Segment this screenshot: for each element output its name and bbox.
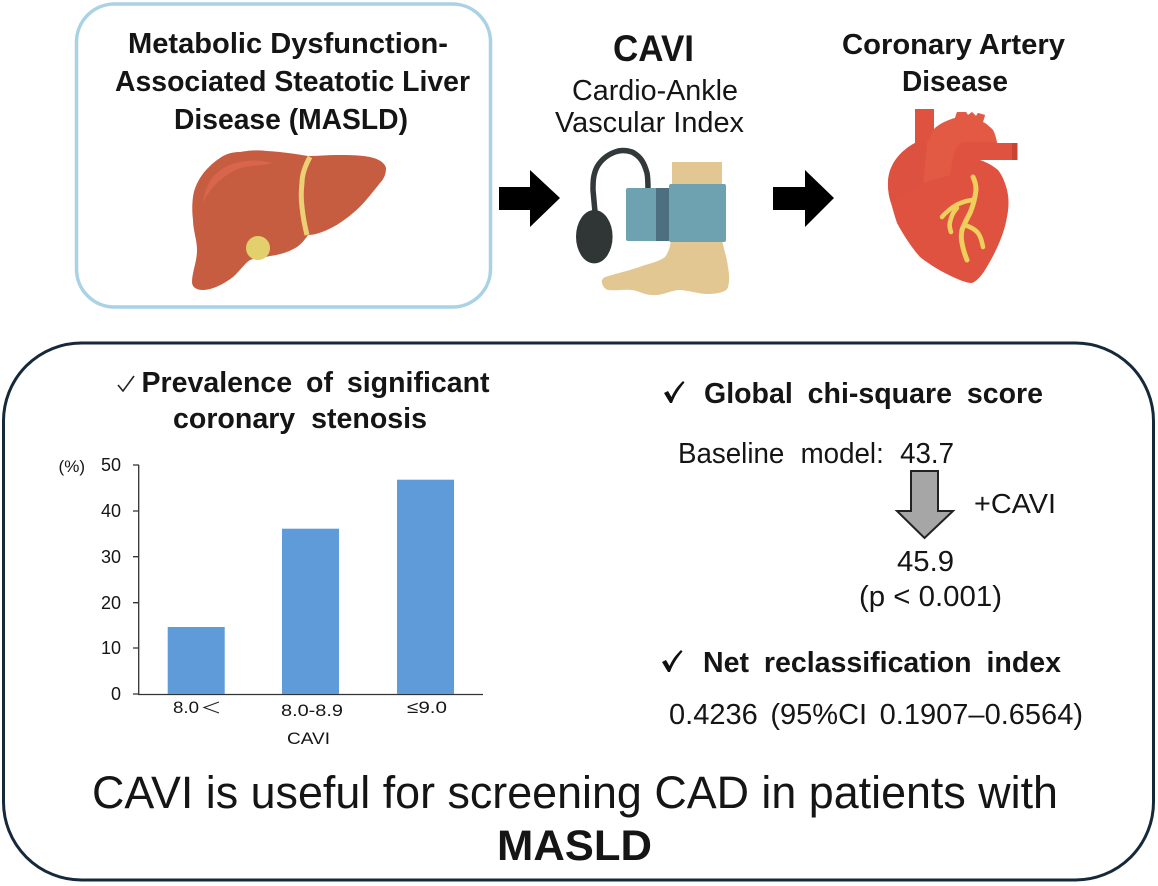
heading: CAVI (555, 28, 744, 139)
section: global chi-square score: (p < 0.001) (859, 581, 1002, 613)
x axis labels: 8.0-8.9 (281, 701, 343, 720)
arrow: MASLD to CAVI (499, 170, 560, 227)
section: net reclassification index: 0.4236 (95%CI 0.1907–0.6564) (669, 699, 1083, 731)
arrow: baseline to CAVI model (897, 471, 953, 538)
section: net reclassification index (662, 647, 1083, 731)
conclusion (92, 767, 1058, 870)
x axis labels: CAVI (287, 729, 330, 748)
heading: prevalence of significant coronary stenosis: coronary stenosis (173, 403, 427, 435)
icon: liver (192, 150, 386, 290)
icon: blood pressure cuff on ankle (576, 150, 729, 295)
y axis labels: 10 (101, 638, 121, 658)
x axis labels (173, 698, 447, 748)
section: global chi-square score: +CAVI (974, 488, 1056, 519)
conclusion: MASLD (497, 822, 652, 870)
heading: MASLD: Metabolic Dysfunction- (128, 28, 448, 60)
y axis labels (59, 455, 121, 704)
heading: MASLD (115, 28, 470, 136)
panel: results (4, 343, 1154, 880)
x axis labels: 8.0 (173, 698, 199, 717)
bar: CAVI 8.0-8.9 (282, 529, 339, 694)
bar: CAVI below 8.0 (168, 627, 225, 694)
y axis labels: 40 (101, 501, 121, 521)
heading: MASLD: Associated Steatotic Liver (115, 66, 470, 98)
section: global chi-square score (664, 378, 1056, 613)
y axis labels: (%) (59, 457, 85, 476)
heading: CAVI: Cardio-Ankle (572, 75, 738, 107)
section: global chi-square score: Global chi-square score (704, 378, 1043, 410)
y axis labels: 20 (101, 593, 121, 613)
heading: CAVI: CAVI (613, 28, 694, 69)
heading: CAVI: Vascular Index (555, 107, 744, 139)
conclusion: CAVI is useful for screening CAD in patients with (92, 767, 1058, 818)
icon: heart (888, 109, 1018, 283)
section: global chi-square score: 45.9 (897, 546, 954, 578)
heading: prevalence of significant coronary stenosis: Prevalence of significant (142, 367, 490, 399)
y axis labels: 30 (101, 547, 121, 567)
y axis labels: 0 (111, 684, 121, 704)
heading: prevalence of significant coronary stenosis (118, 367, 490, 435)
heading: MASLD: Disease (MASLD) (174, 104, 408, 136)
heading: coronary artery disease: Disease (902, 66, 1008, 98)
bar: CAVI 9.0 and above (397, 480, 454, 694)
section: global chi-square score: Baseline model: 43.7 (678, 438, 954, 470)
panel: MASLD (76, 4, 490, 307)
y axis labels: 50 (101, 455, 121, 475)
bar chart: prevalence by CAVI (59, 455, 483, 748)
arrow: CAVI to coronary artery disease (773, 170, 834, 227)
heading: coronary artery disease: Coronary Artery (842, 29, 1065, 61)
heading: coronary artery disease (842, 29, 1065, 98)
x axis labels: ≤9.0 (407, 698, 447, 717)
section: net reclassification index: Net reclassification index (703, 647, 1061, 679)
